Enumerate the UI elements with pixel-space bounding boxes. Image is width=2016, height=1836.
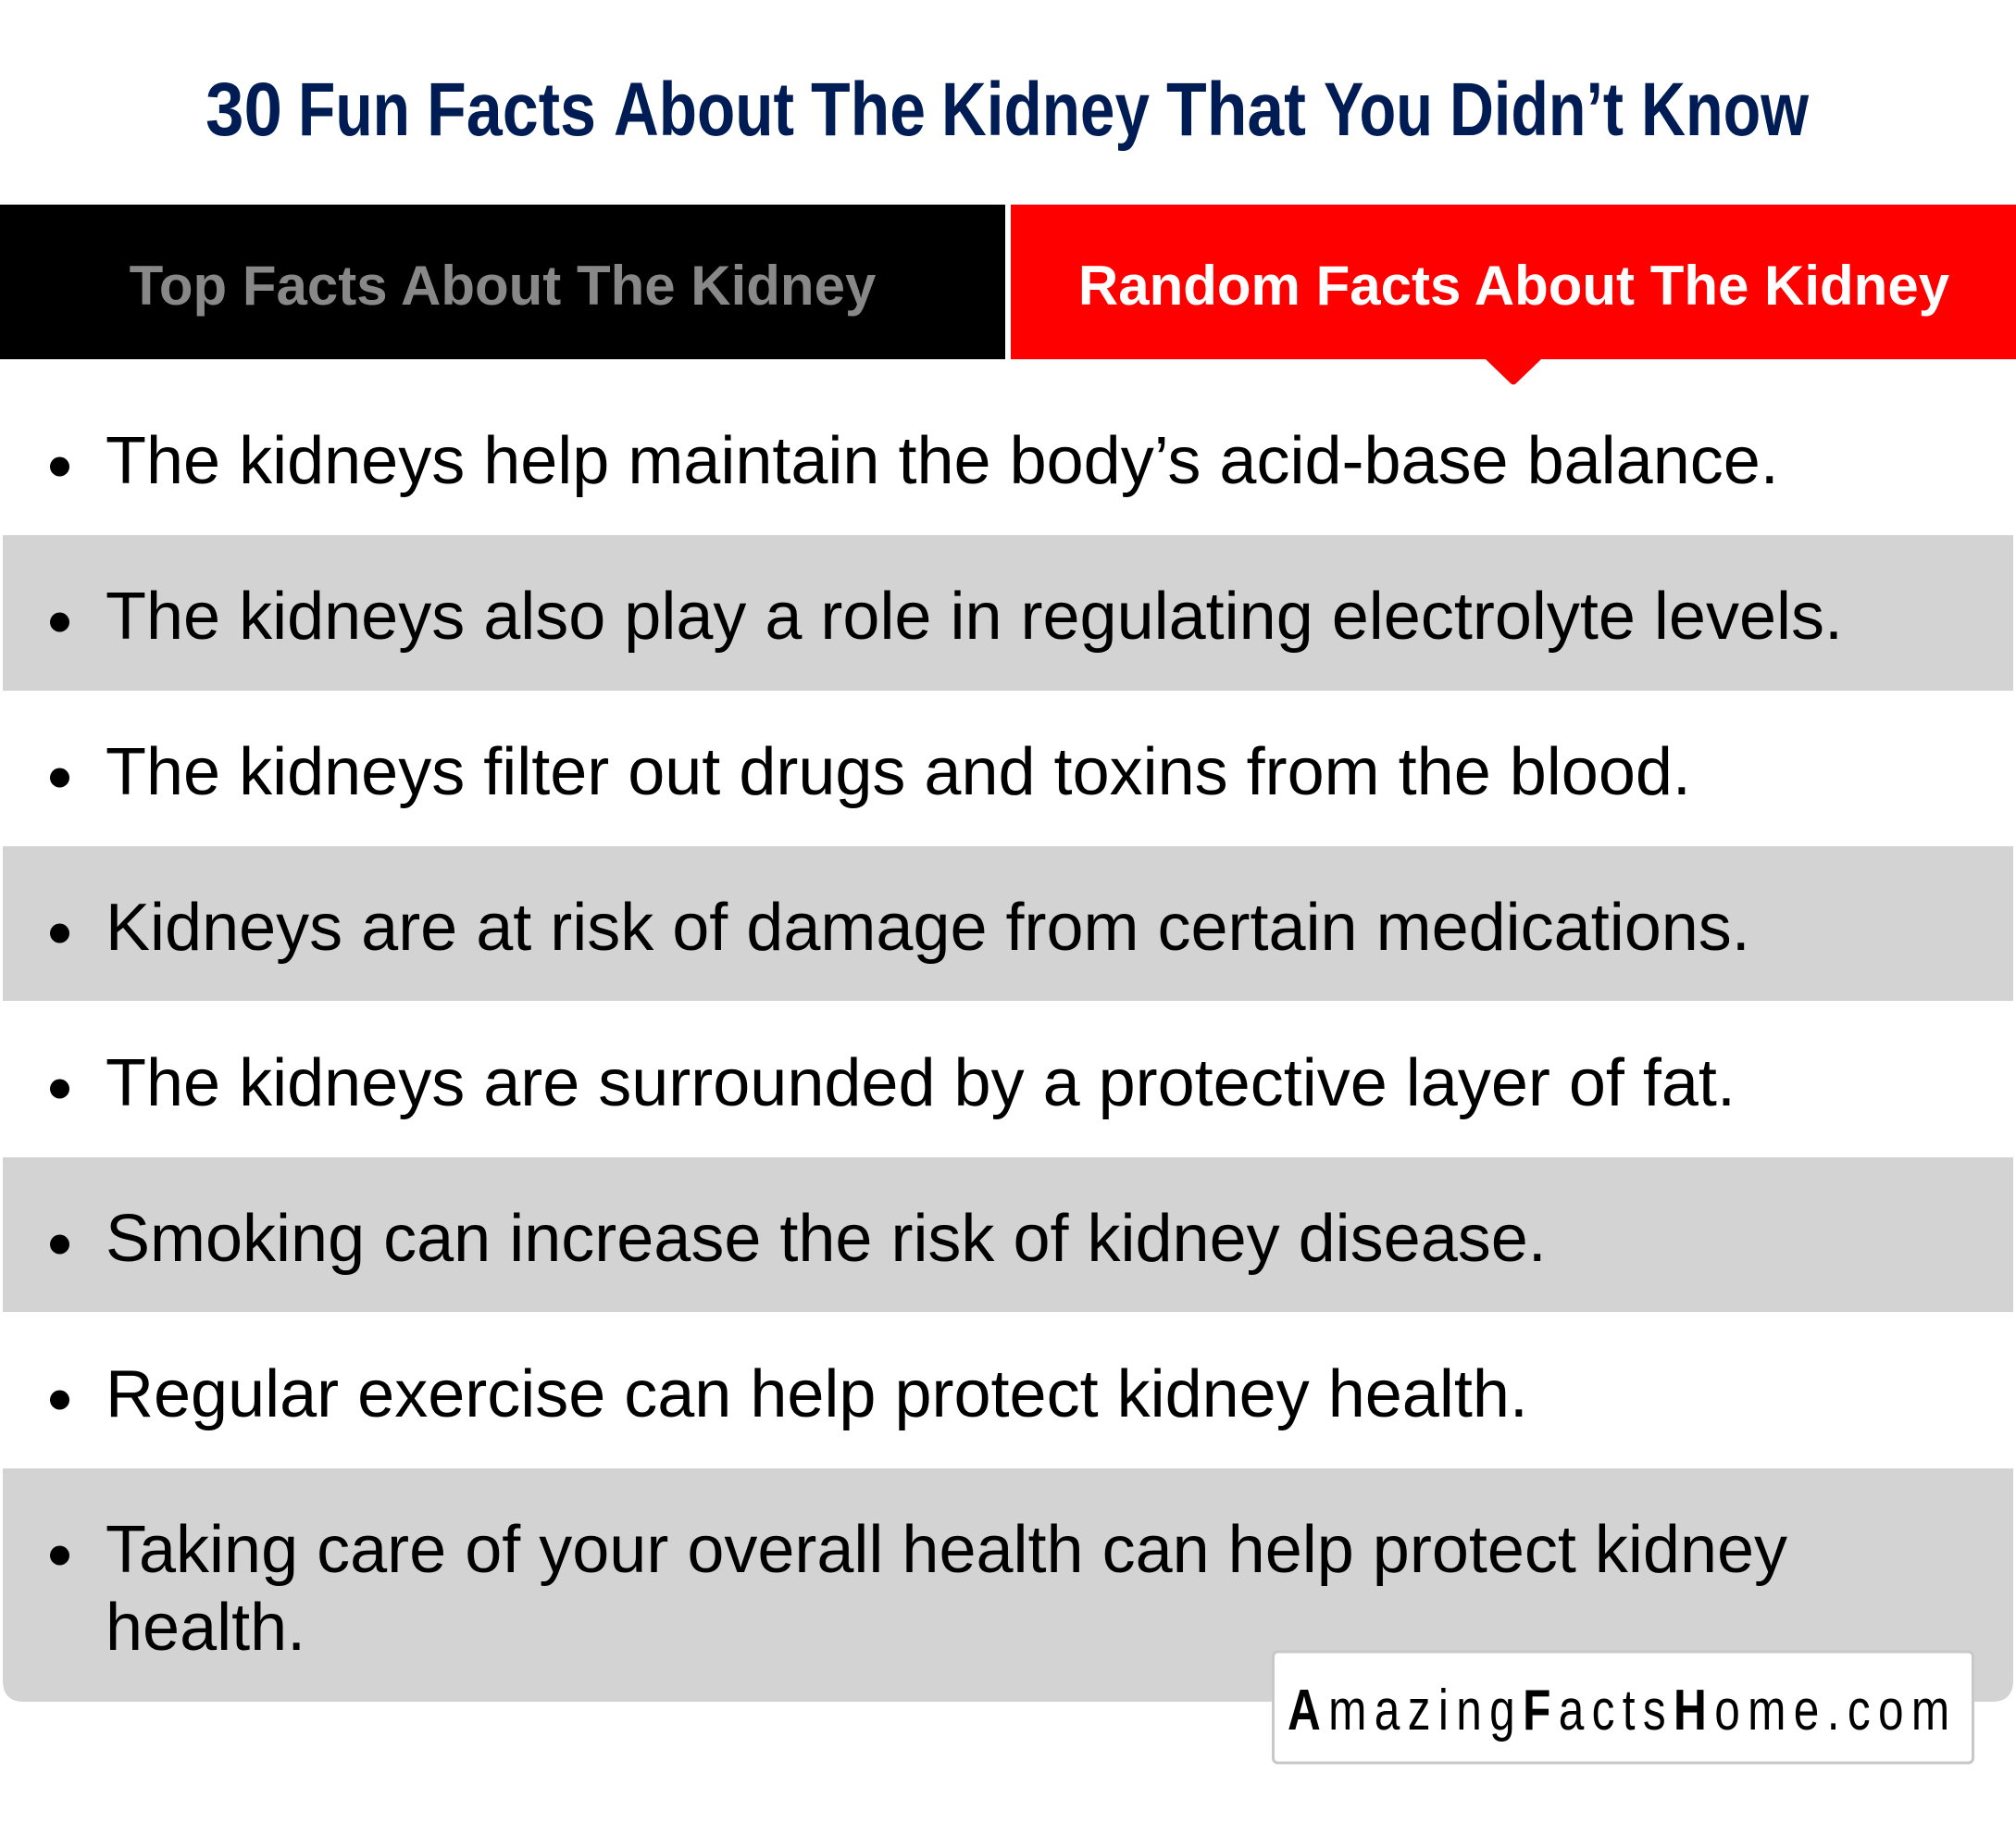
fact row 6 bbox=[3, 1157, 2013, 1312]
fact row 1: The kidneys help maintain the body’s acid-base balance. bbox=[106, 424, 1779, 498]
fact row 2: The kidneys also play a role in regulating electrolyte levels. bbox=[106, 580, 1843, 654]
title: Kidney bbox=[941, 68, 1150, 152]
fact row 2 bbox=[3, 535, 2013, 691]
fact row 8: Taking care of your overall health can help protect kidney bbox=[106, 1513, 1787, 1587]
tab: top facts: Top Facts About The Kidney bbox=[130, 255, 877, 317]
title: Didn’t bbox=[1450, 68, 1624, 152]
fact row 5: The kidneys are surrounded by a protective layer of fat. bbox=[106, 1046, 1736, 1120]
fact row 7: Regular exercise can help protect kidney health. bbox=[106, 1357, 1528, 1431]
title: You bbox=[1324, 68, 1433, 152]
fact row 4 bbox=[3, 846, 2013, 1001]
tab: random facts (active) bbox=[1011, 205, 2016, 385]
watermark badge: AmazingFactsHome.com bbox=[1288, 1678, 1949, 1742]
watermark badge bbox=[1274, 1652, 1973, 1763]
title: About bbox=[614, 68, 794, 152]
title: That bbox=[1166, 68, 1306, 152]
tab: top facts bbox=[0, 205, 1005, 359]
tab: random facts (active): Random Facts About The Kidney bbox=[1078, 255, 1950, 317]
title: Facts bbox=[427, 68, 596, 152]
title: Fun bbox=[298, 68, 410, 152]
fact row 6: Smoking can increase the risk of kidney disease. bbox=[106, 1202, 1547, 1276]
fact row 8: health. bbox=[106, 1591, 305, 1665]
title: The bbox=[811, 68, 926, 152]
title: 30 bbox=[205, 68, 282, 152]
title: Know bbox=[1641, 68, 1809, 152]
fact row 4: Kidneys are at risk of damage from certain medications. bbox=[106, 891, 1750, 965]
fact row 8 bbox=[3, 1468, 2013, 1702]
title bbox=[205, 68, 1809, 152]
fact row 3: The kidneys filter out drugs and toxins from the blood. bbox=[106, 735, 1691, 809]
